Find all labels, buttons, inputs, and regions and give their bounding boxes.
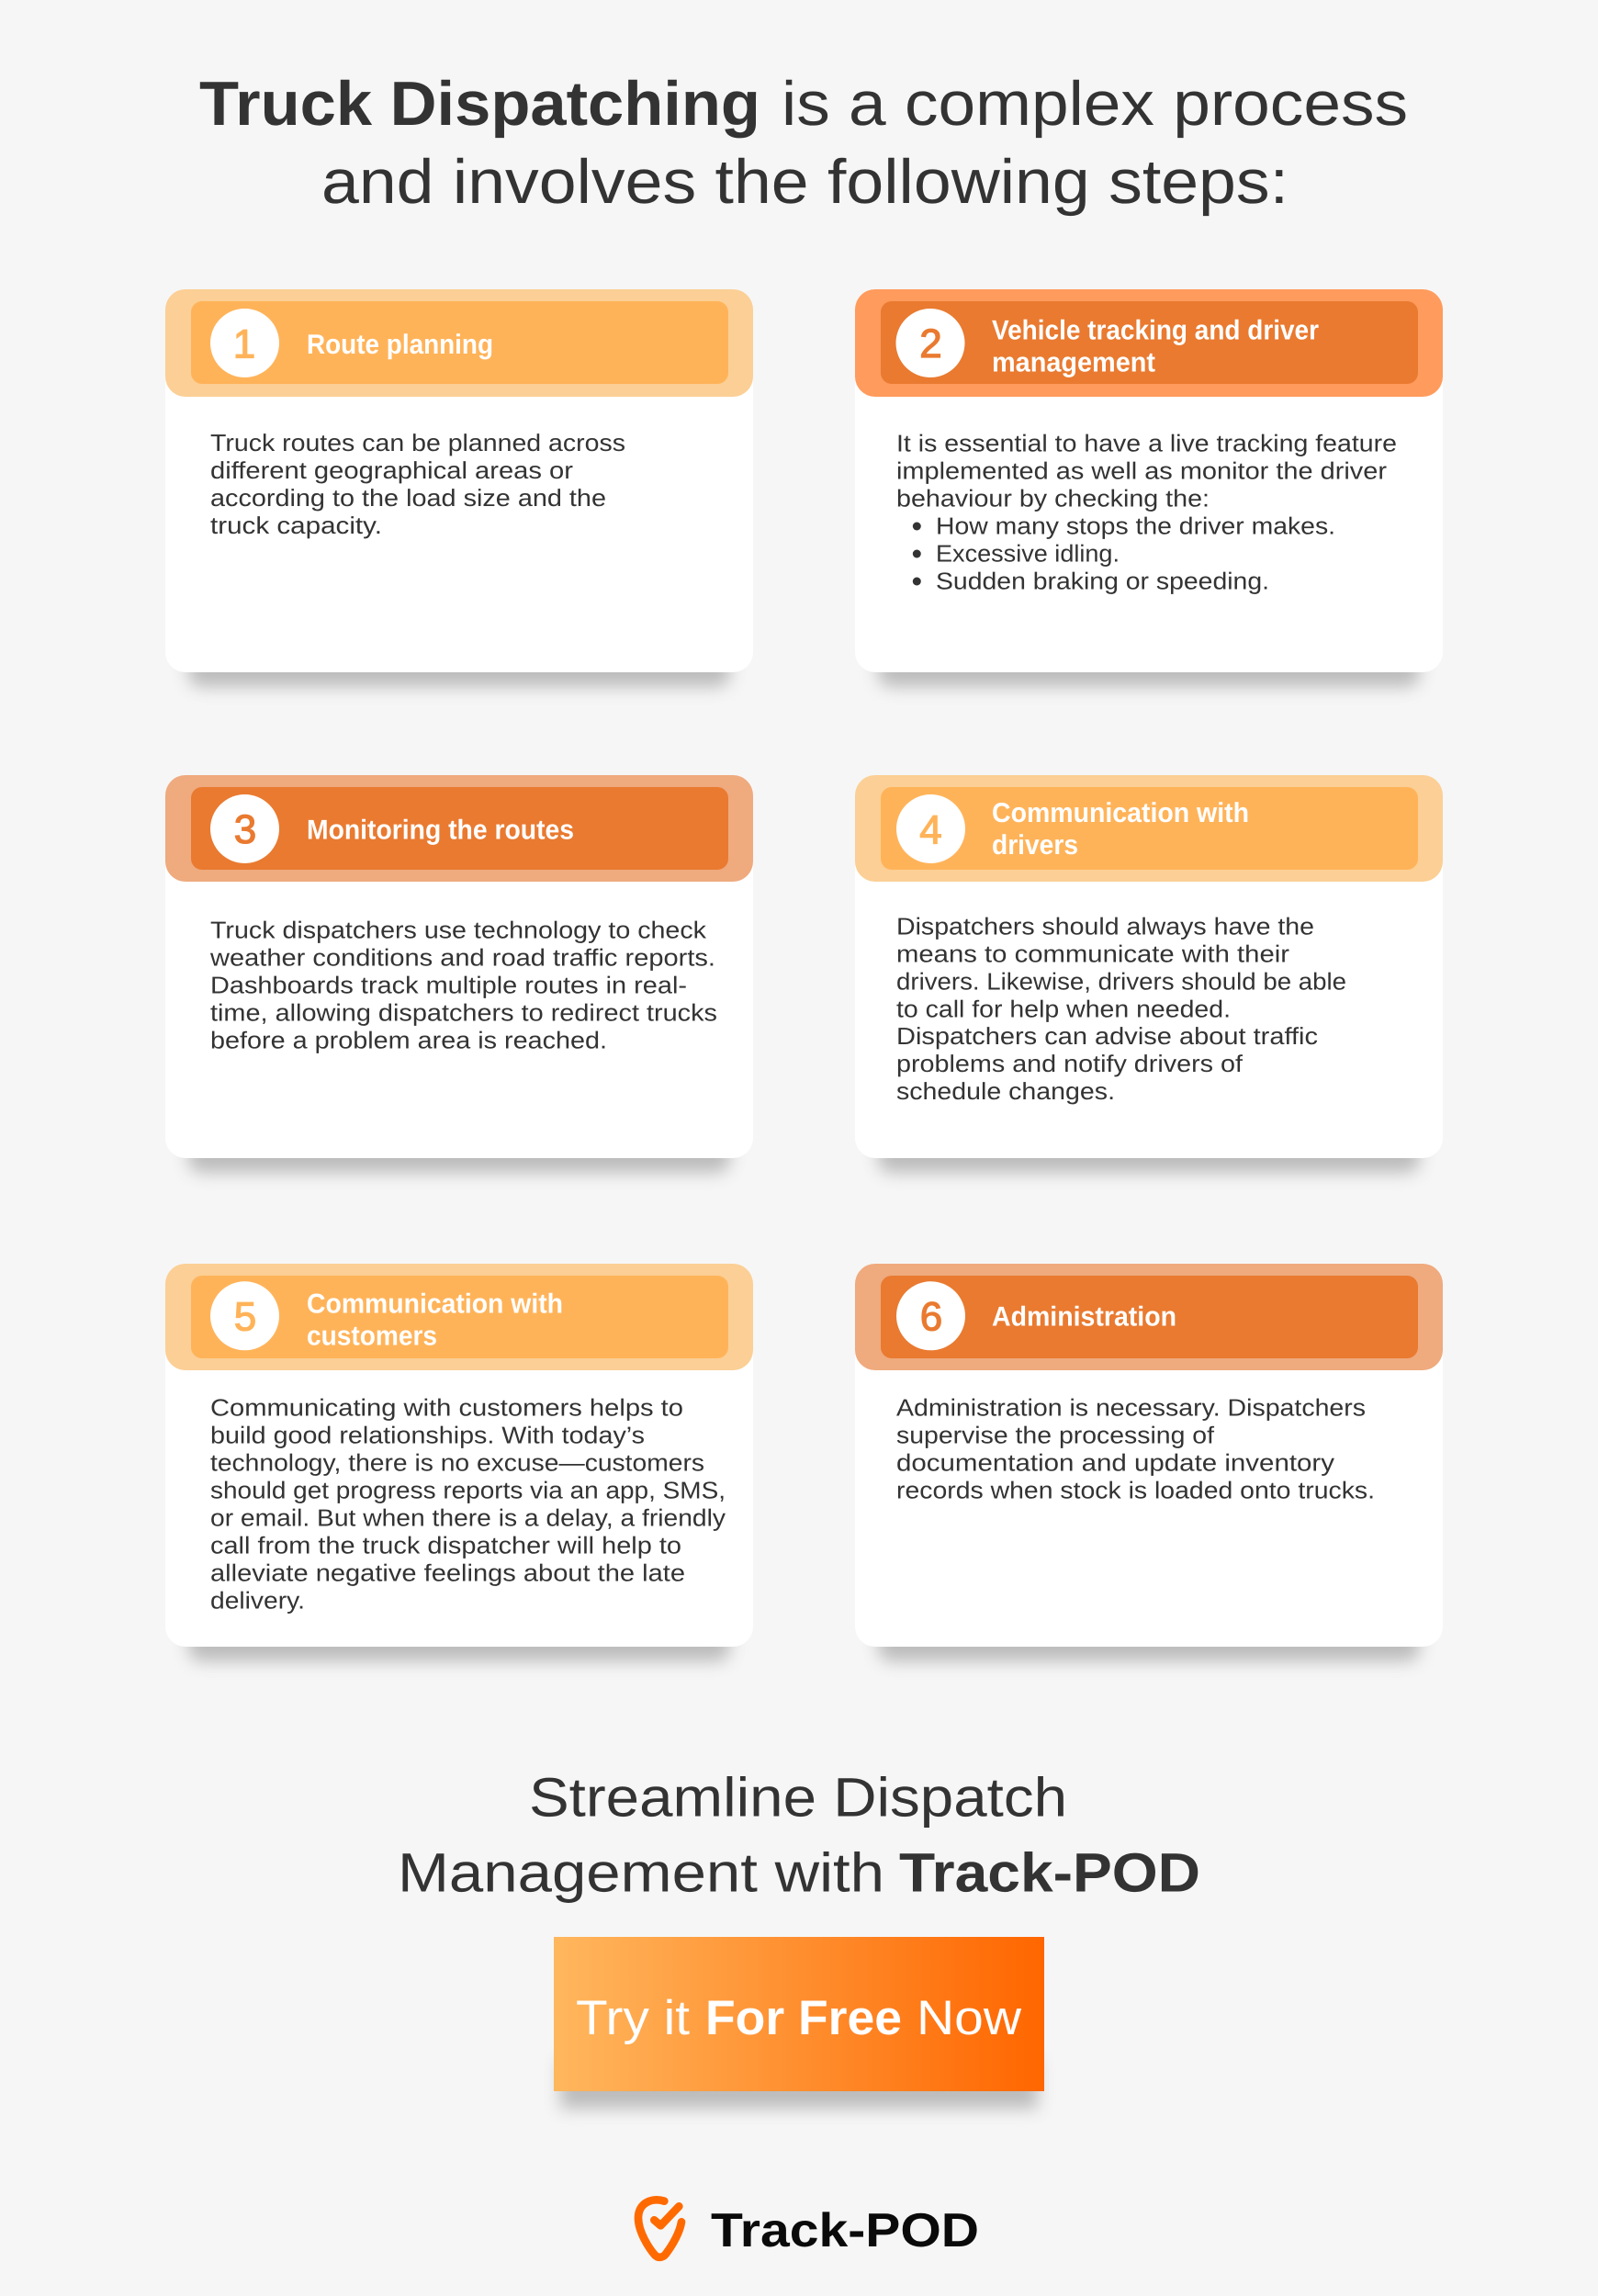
- heading: Route planning: [307, 330, 493, 360]
- body text: [896, 1394, 1375, 1504]
- card shadow: [878, 636, 1420, 687]
- number badge: [210, 794, 279, 863]
- card body: [165, 289, 753, 672]
- body text: Administration is necessary. Dispatchers: [896, 1394, 1366, 1422]
- body text: different geographical areas or: [210, 456, 573, 484]
- body text: according to the load size and the: [210, 484, 606, 512]
- body text: Communicating with customers helps to: [210, 1394, 683, 1422]
- panel: step 2 vehicle tracking: [855, 289, 1443, 687]
- body text: schedule changes.: [896, 1077, 1115, 1105]
- button label: For Free: [705, 1991, 902, 2045]
- panel: step 1 route planning: [165, 289, 753, 687]
- card shadow: [188, 1121, 730, 1173]
- bullet list: [913, 512, 1335, 595]
- button label: Now: [917, 1991, 1022, 2045]
- card shadow: [878, 1610, 1420, 1661]
- body text: problems and notify drivers of: [896, 1050, 1244, 1077]
- number badge: 3: [234, 807, 256, 852]
- body text: [210, 1394, 726, 1615]
- number badge: [896, 309, 964, 377]
- body text: truck capacity.: [210, 512, 382, 539]
- header band: [855, 1264, 1443, 1370]
- heading: management: [992, 347, 1155, 377]
- card shadow: [878, 1121, 1420, 1173]
- call to action heading: Management with: [398, 1841, 884, 1903]
- number badge: 4: [919, 807, 942, 852]
- header band: [855, 775, 1443, 882]
- card body: [855, 775, 1443, 1158]
- header band: [165, 775, 753, 882]
- heading: customers: [307, 1321, 437, 1351]
- call to action heading: Streamline Dispatch: [529, 1767, 1067, 1829]
- body text: should get progress reports via an app, SMS,: [210, 1477, 726, 1504]
- heading: Communication with: [307, 1289, 563, 1319]
- panel: step 5 communication with customers: [165, 1264, 753, 1661]
- wordmark: Track-POD: [711, 2204, 979, 2257]
- body text: It is essential to have a live tracking feature: [896, 430, 1397, 457]
- body text: weather conditions and road traffic reports.: [209, 944, 715, 972]
- panel: step 3 monitoring the routes: [165, 775, 753, 1173]
- body text: drivers. Likewise, drivers should be able: [896, 968, 1346, 996]
- card body: [855, 289, 1443, 672]
- number badge: [210, 1281, 279, 1350]
- call to action button: [554, 1937, 1044, 2109]
- button shadow: [560, 2059, 1038, 2109]
- icon: location pin with check mark: [638, 2200, 681, 2257]
- heading: Monitoring the routes: [307, 815, 574, 845]
- title: [199, 69, 1408, 217]
- bullet list: Excessive idling.: [936, 540, 1120, 568]
- number badge: 2: [919, 321, 942, 366]
- body text: Truck routes can be planned across: [210, 429, 625, 456]
- body text: before a problem area is reached.: [210, 1027, 607, 1054]
- number badge: [210, 309, 279, 377]
- title: is a complex process: [782, 69, 1408, 139]
- header band: [165, 289, 753, 397]
- body text: [896, 913, 1346, 1105]
- body text: documentation and update inventory: [896, 1449, 1334, 1477]
- bullet list: Sudden braking or speeding.: [936, 568, 1269, 595]
- logo: Track-POD: [638, 2200, 979, 2257]
- header band: [855, 289, 1443, 397]
- card shadow: [188, 1610, 730, 1661]
- button label: Try it: [576, 1991, 690, 2045]
- card shadow: [188, 636, 730, 687]
- panel: step 4 communication with drivers: [855, 775, 1443, 1173]
- body text: technology, there is no excuse—customers: [210, 1449, 704, 1477]
- body text: means to communicate with their: [896, 940, 1289, 968]
- call to action heading: Track-POD: [899, 1841, 1200, 1903]
- body text: records when stock is loaded onto trucks.: [896, 1477, 1375, 1504]
- bullet list: How many stops the driver makes.: [936, 512, 1335, 540]
- card body: [165, 775, 753, 1158]
- heading: drivers: [992, 830, 1078, 861]
- heading: Communication with: [992, 798, 1249, 828]
- body text: to call for help when needed.: [896, 996, 1231, 1023]
- button face: [554, 1937, 1044, 2091]
- body text: time, allowing dispatchers to redirect trucks: [210, 999, 717, 1027]
- panel: step 6 administration: [855, 1264, 1443, 1661]
- body text: behaviour by checking the:: [896, 485, 1210, 512]
- body text: implemented as well as monitor the driver: [896, 457, 1387, 485]
- heading: [992, 798, 1249, 861]
- body text: alleviate negative feelings about the late: [210, 1559, 685, 1587]
- heading: Administration: [992, 1302, 1176, 1333]
- number badge: [896, 1281, 965, 1350]
- card body: [165, 1264, 753, 1647]
- body text: delivery.: [210, 1587, 305, 1615]
- body text: call from the truck dispatcher will help to: [210, 1532, 681, 1559]
- body text: Dispatchers should always have the: [896, 913, 1314, 940]
- number badge: 1: [233, 321, 255, 367]
- header band: [165, 1264, 753, 1370]
- body text: [209, 917, 717, 1054]
- title: and involves the following steps:: [321, 147, 1289, 217]
- number badge: [896, 794, 965, 863]
- call to action heading: [398, 1767, 1200, 1903]
- number badge: 6: [920, 1295, 942, 1340]
- heading: [992, 315, 1319, 377]
- body text: Truck dispatchers use technology to check: [210, 917, 707, 944]
- card body: [855, 1264, 1443, 1647]
- body text: Dashboards track multiple routes in real-: [210, 972, 687, 999]
- heading: Vehicle tracking and driver: [992, 315, 1319, 345]
- body text: supervise the processing of: [896, 1422, 1215, 1449]
- body text: or email. But when there is a delay, a friendly: [210, 1504, 726, 1532]
- body text: Dispatchers can advise about traffic: [896, 1022, 1318, 1050]
- heading: [307, 1289, 563, 1351]
- body text: [896, 430, 1397, 512]
- number badge: 5: [234, 1295, 256, 1340]
- button label: [576, 1991, 1022, 2045]
- body text: [210, 429, 625, 539]
- body text: build good relationships. With today’s: [210, 1422, 645, 1449]
- title: Truck Dispatching: [199, 69, 760, 139]
